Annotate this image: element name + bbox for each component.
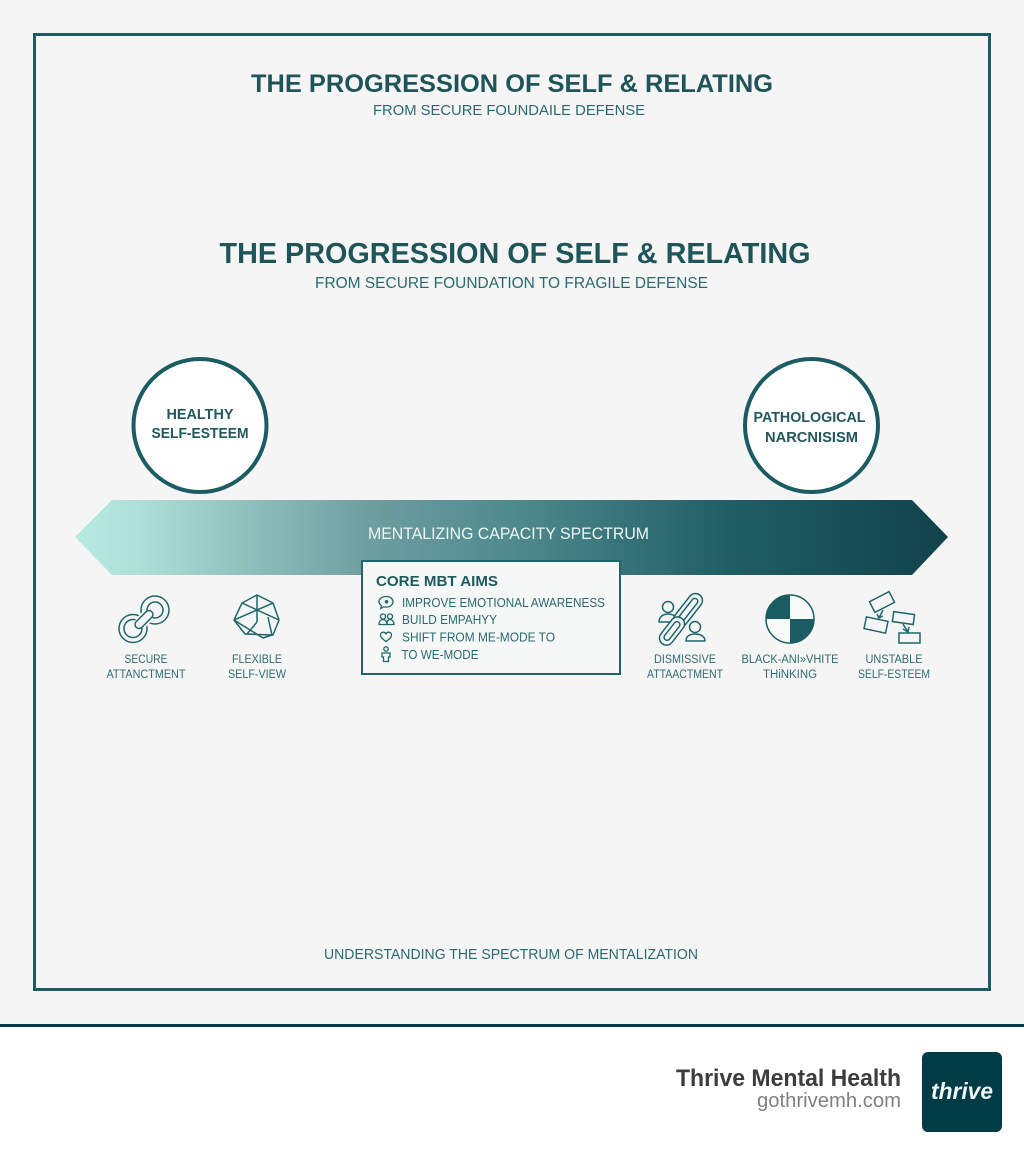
logo badge: thrive <box>931 1078 993 1104</box>
icon: faceted polyhedron <box>234 595 279 638</box>
main subtitle: FROM SECURE FOUNDATION TO FRAGILE DEFENSE <box>315 275 708 292</box>
circle: pathological narcissism: PATHOLOGICAL <box>754 410 866 426</box>
flexible self-view item: SELF-VIEW <box>228 669 286 681</box>
icon: quartered circle <box>766 595 814 643</box>
black-and-white thinking item: THiNKING <box>763 669 817 681</box>
dismissive attachment item: DISMISSIVE <box>654 654 716 666</box>
top subtitle: FROM SECURE FOUNDAILE DEFENSE <box>373 102 645 119</box>
spectrum arrow <box>75 500 948 575</box>
unstable self-esteem item <box>858 592 930 681</box>
circle: pathological narcissism <box>745 359 878 492</box>
secure attachment item: ATTANCTMENT <box>106 669 186 681</box>
footer url: gothrivemh.com <box>757 1090 901 1112</box>
secure attachment item: SECURE <box>124 654 168 666</box>
icon: linked rings <box>119 596 169 642</box>
aim: shift from me-mode: SHIFT FROM ME-MODE TO <box>402 630 555 644</box>
footer <box>0 1024 1024 1154</box>
circle: healthy self-esteem: SELF-ESTEEM <box>152 426 248 442</box>
spectrum arrow: MENTALIZING CAPACITY SPECTRUM <box>368 525 649 543</box>
unstable self-esteem item: SELF-ESTEEM <box>858 669 930 681</box>
aim: emotional awareness: IMPROVE EMOTIONAL AWARENESS <box>402 596 605 610</box>
dismissive attachment item <box>647 591 723 681</box>
black-and-white thinking item: BLACK-ANI»VHITE <box>742 654 839 666</box>
icon: broken chain with people <box>657 591 705 648</box>
top heading <box>251 70 773 119</box>
top title: THE PROGRESSION OF SELF & RELATING <box>251 70 773 98</box>
logo badge <box>922 1052 1002 1132</box>
unstable self-esteem item: UNSTABLE <box>866 654 923 666</box>
dismissive attachment item: ATTAACTMENT <box>647 669 723 681</box>
secure attachment item <box>106 596 186 681</box>
flexible self-view item <box>228 595 286 681</box>
panel heading: CORE MBT AIMS <box>376 573 498 590</box>
bottom caption: UNDERSTANDING THE SPECTRUM OF MENTALIZATION <box>324 947 698 963</box>
circle: healthy self-esteem <box>134 359 266 492</box>
panel: core MBT aims <box>362 561 620 674</box>
aim: to we-mode <box>382 647 478 662</box>
aim: to we-mode: TO WE-MODE <box>402 648 478 662</box>
aim: build empathy: BUILD EMPAHYY <box>402 613 498 627</box>
main title: THE PROGRESSION OF SELF & RELATING <box>220 238 810 270</box>
footer brand name: Thrive Mental Health <box>676 1065 901 1092</box>
circle: healthy self-esteem: HEALTHY <box>166 407 234 423</box>
flexible self-view item: FLEXIBLE <box>232 654 282 666</box>
circle: pathological narcissism: NARCNISISM <box>765 430 858 446</box>
main heading <box>220 238 810 292</box>
icon: scattered blocks <box>864 592 920 643</box>
black-and-white thinking item <box>742 595 839 681</box>
outer frame <box>34 34 990 990</box>
